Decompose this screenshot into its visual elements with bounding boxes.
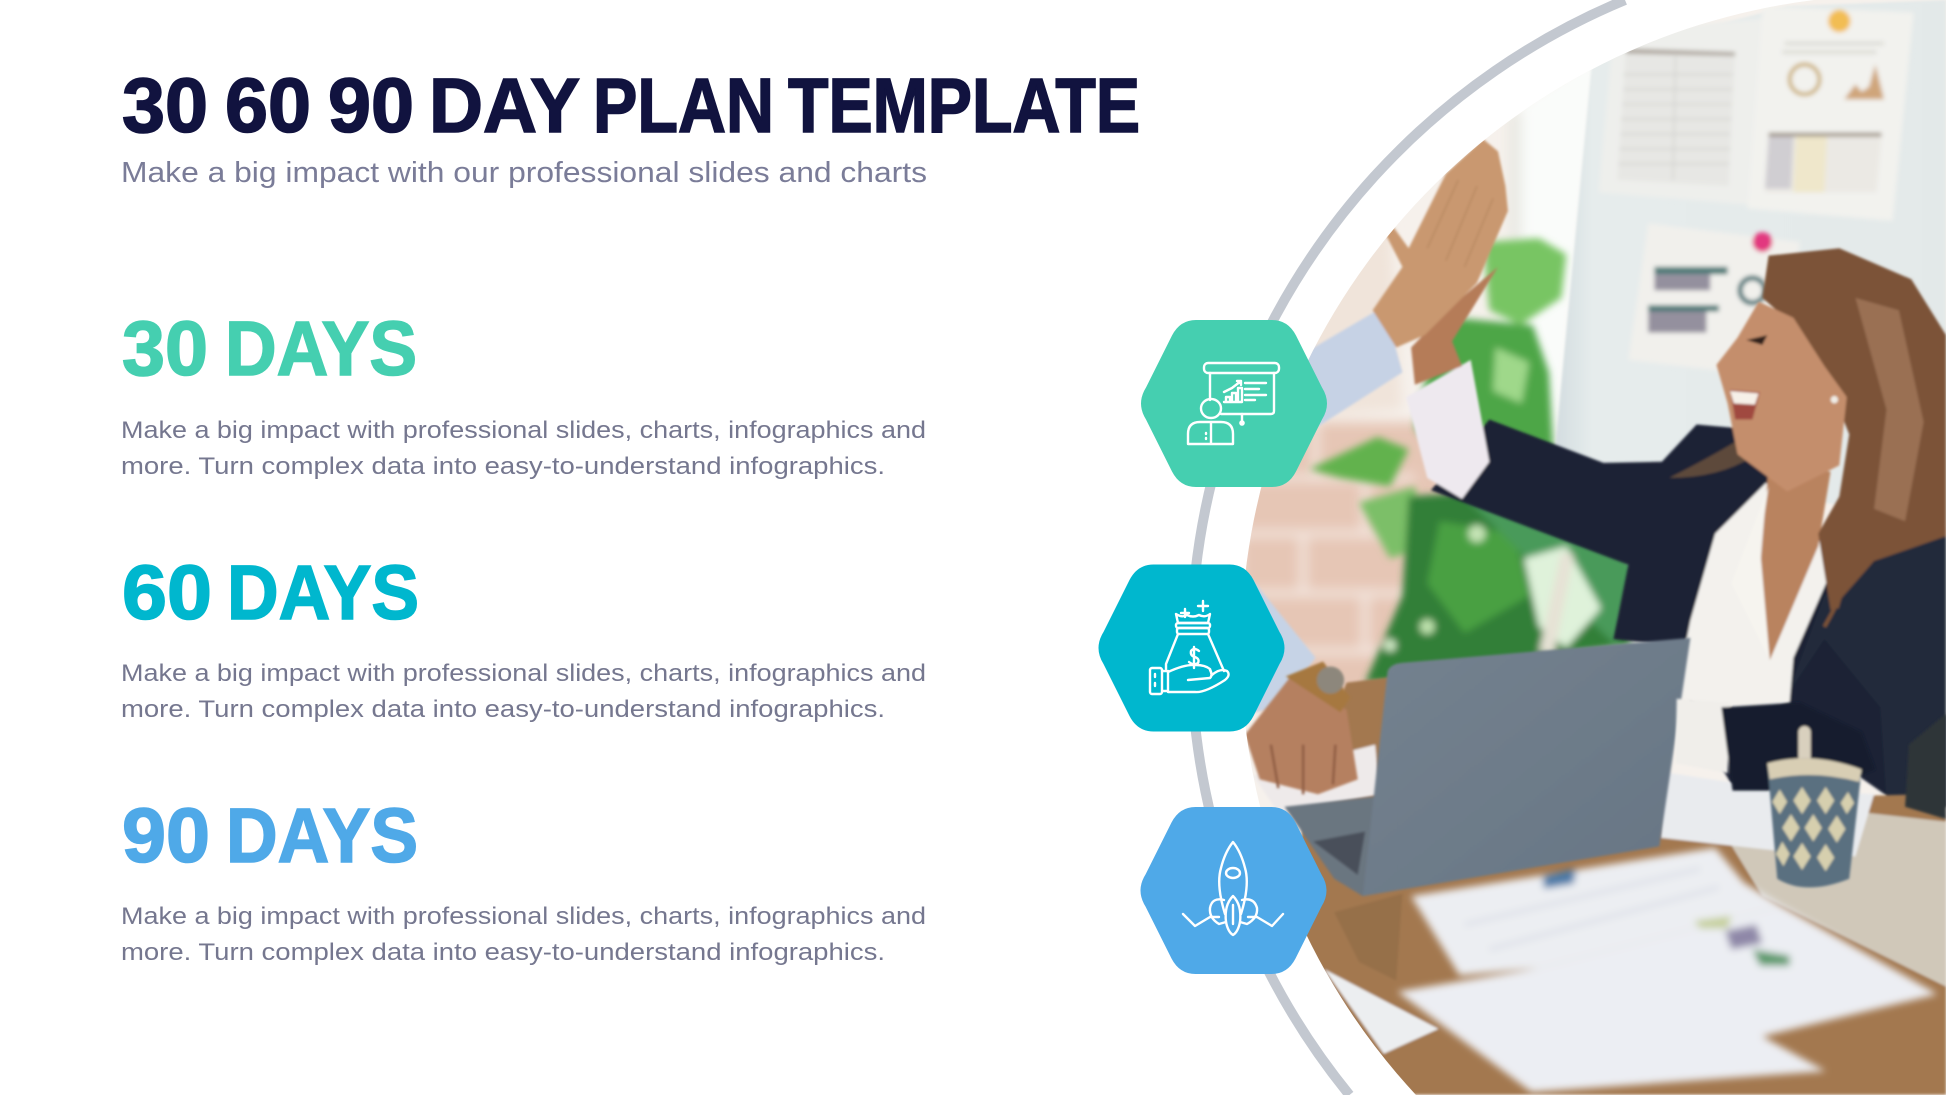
title: 60 (225, 63, 311, 149)
heading: 60 days (122, 550, 419, 636)
face (1716, 302, 1847, 491)
heading: 90 days: DAYS (226, 793, 418, 879)
icon: rocket launch (1183, 842, 1283, 935)
man's sleeve (1303, 307, 1402, 428)
heading: 30 days (122, 306, 417, 392)
heading: 30 days: 30 (122, 306, 208, 392)
decorative ring (1191, 0, 1625, 1095)
fly-away hair (1669, 441, 1752, 478)
heading: 30 days: DAYS (225, 306, 417, 392)
man's raised hand (1373, 139, 1508, 348)
woman's forearm and hand (1411, 267, 1498, 385)
title (122, 63, 1140, 149)
white sleeve (1406, 360, 1489, 499)
body: 60 days: Make a big impact with professional slides, charts, infographics and (121, 660, 926, 687)
shirt (1682, 481, 1828, 709)
body: 90 days (121, 903, 926, 966)
hexagon: 30 days presentation icon (1141, 320, 1327, 487)
icon: money bag in hand (1150, 601, 1229, 694)
laptop (1285, 638, 1690, 896)
heading: 90 days: 90 (122, 793, 210, 879)
subtitle: Make a big impact with our professional slides and charts (121, 157, 927, 189)
plant (1309, 238, 1638, 683)
heading: 60 days: DAYS (227, 550, 419, 636)
title: 30 (122, 63, 208, 149)
woman (1247, 139, 1946, 813)
cuff and mug (1675, 699, 1946, 887)
heading: 60 days: 60 (122, 550, 212, 636)
body: 90 days: Make a big impact with professional slides, charts, infographics and (121, 903, 926, 930)
hexagon: 90 days rocket icon (1140, 807, 1326, 974)
neck skin (1760, 465, 1831, 660)
title: TEMPLATE (788, 63, 1140, 149)
section: 30 days (121, 306, 926, 480)
man's lower sleeve (1253, 579, 1316, 713)
icon: presenter and board (1188, 363, 1279, 444)
heading: 90 days (122, 793, 418, 879)
body: 60 days (121, 660, 926, 723)
papers on desk (1397, 848, 1937, 1092)
body: 60 days: more. Turn complex data into easy-to-understand infographics. (121, 696, 885, 723)
title: PLAN (593, 63, 774, 149)
title: DAY (429, 63, 580, 149)
photo: two colleagues high-fiving at a desk (1229, 0, 1946, 1095)
body: 30 days (121, 417, 926, 480)
blazer (1430, 418, 1888, 796)
section: 90 days (121, 793, 926, 966)
hexagon: 60 days money bag icon (1098, 564, 1284, 732)
body: 90 days: more. Turn complex data into easy-to-understand infographics. (121, 939, 885, 966)
hair (1762, 248, 1946, 611)
body: 30 days: more. Turn complex data into easy-to-understand infographics. (121, 453, 885, 480)
body: 30 days: Make a big impact with professional slides, charts, infographics and (121, 417, 926, 444)
whiteboard (1554, 0, 1946, 521)
desk (1254, 676, 1946, 1095)
wall posters (1599, 6, 1914, 379)
section: 60 days (121, 550, 926, 723)
title: 90 (328, 63, 414, 149)
man's hand and watch (1245, 662, 1358, 794)
